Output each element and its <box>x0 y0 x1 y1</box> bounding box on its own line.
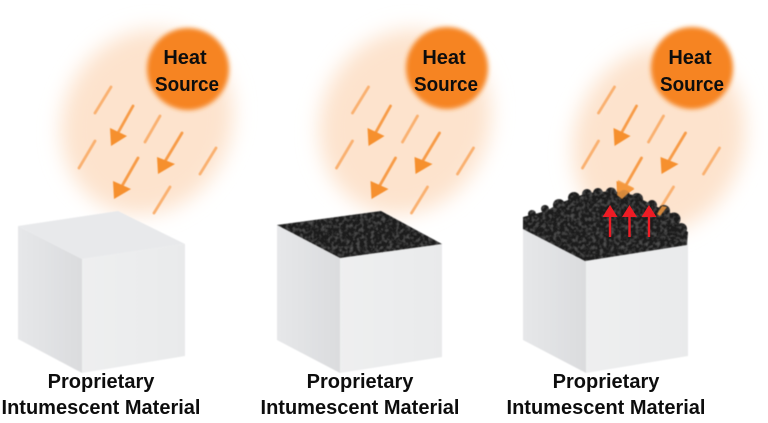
cube 2: block with charred top surface <box>277 211 442 373</box>
heat source circle 2 <box>406 27 488 109</box>
heat source label 1: Heat <box>163 47 207 69</box>
caption 1: Proprietary <box>48 371 155 393</box>
charred top surface <box>277 211 442 258</box>
heat rays 3 <box>582 87 720 213</box>
heat source label 2: Source <box>414 74 478 96</box>
panel: heat source 3 <box>542 17 768 263</box>
heat source circle 1 <box>147 28 229 110</box>
red arrows: released gas <box>602 205 656 237</box>
heat source label 3: Heat <box>668 47 712 69</box>
panel: heat source 2 <box>289 1 521 243</box>
heat source label 1: Source <box>155 74 219 96</box>
cube 3: block with expanded char layer <box>523 180 688 373</box>
cube 1: unexposed white block <box>18 211 185 373</box>
heat source circle 3 <box>651 27 733 109</box>
caption 1: Intumescent Material <box>2 397 200 419</box>
caption 2: Intumescent Material <box>261 397 459 419</box>
heat rays 1 <box>79 87 216 213</box>
heat glow 3 <box>542 17 768 263</box>
heat glow 2 <box>289 1 521 243</box>
caption 3: Intumescent Material <box>507 397 705 419</box>
expanded char mound <box>523 188 688 261</box>
caption 3: Proprietary <box>553 371 660 393</box>
panel: heat source 1 <box>31 1 263 243</box>
heat rays 2 <box>336 87 474 213</box>
heat source label 2: Heat <box>422 47 466 69</box>
caption 2: Proprietary <box>307 371 414 393</box>
heat source label 3: Source <box>660 74 724 96</box>
heat glow 1 <box>31 1 263 243</box>
flame tips over char <box>617 180 667 216</box>
